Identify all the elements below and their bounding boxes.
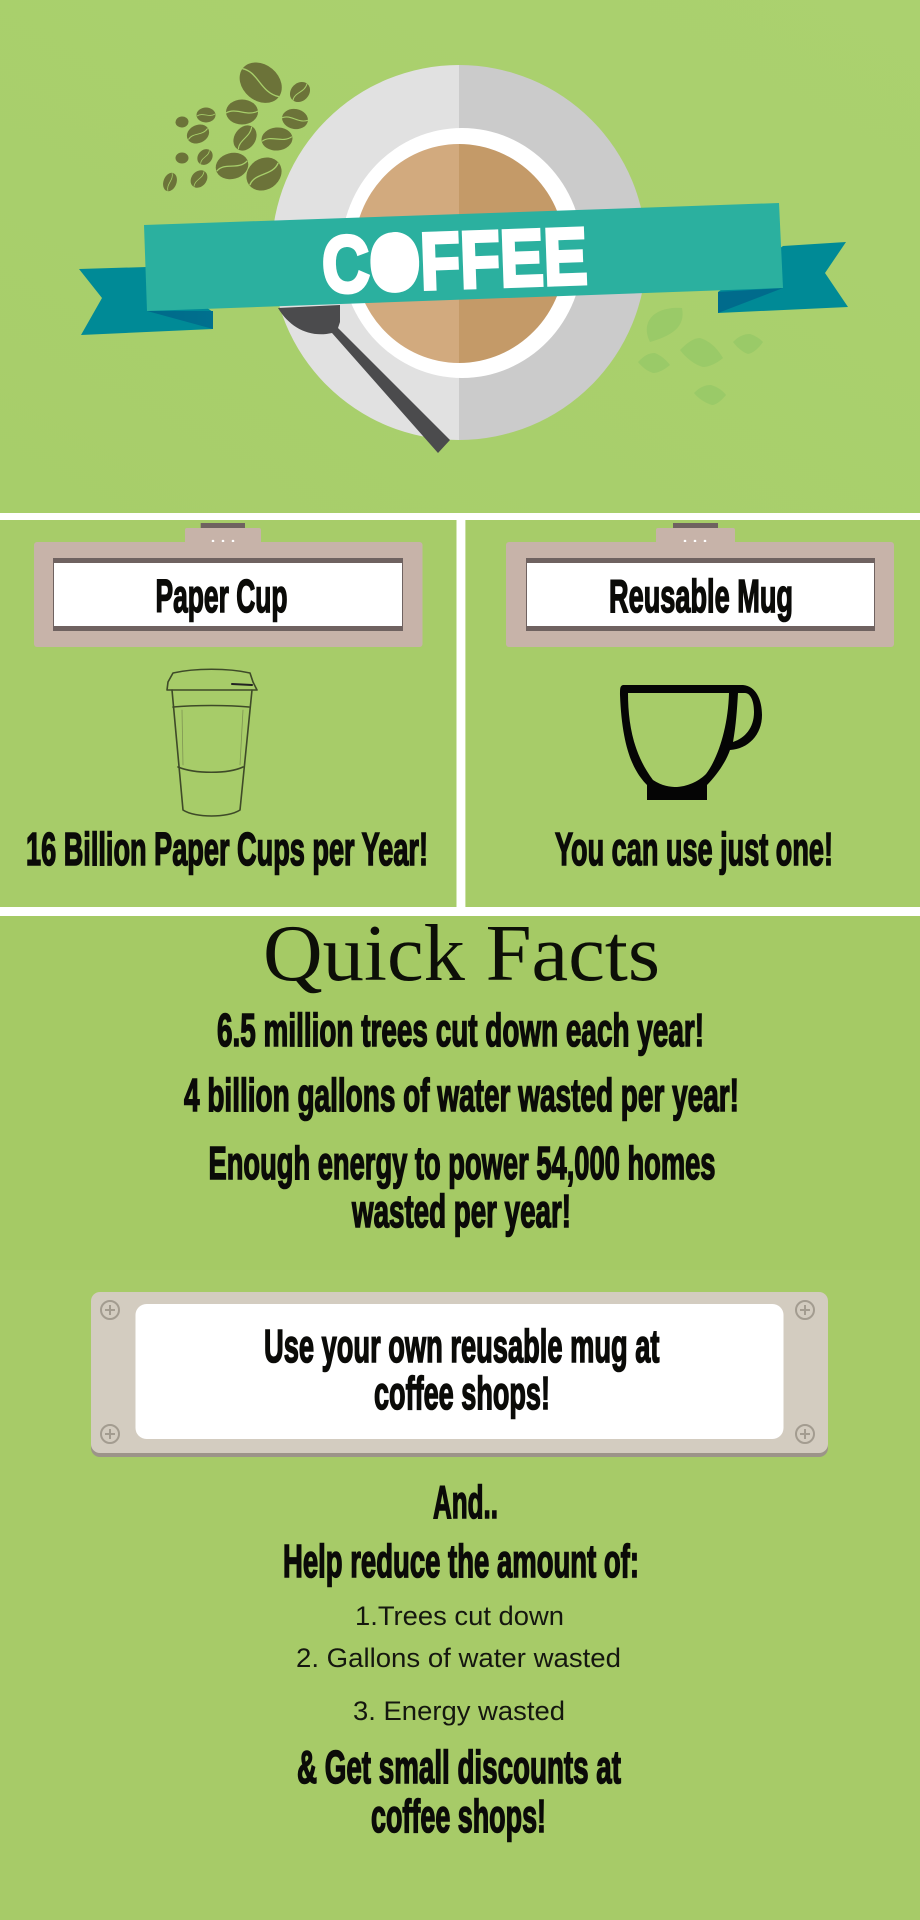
icon: spoon — [278, 305, 450, 453]
ribbon left fold — [147, 311, 213, 329]
ribbon left tail — [79, 267, 213, 335]
cup rim — [341, 128, 583, 378]
sign: reusable mug — [506, 523, 894, 647]
callout plate: use your own mug — [91, 1292, 828, 1457]
panel: header background — [0, 0, 920, 513]
caption: 16 billion cups: 16 Billion Paper Cups per Year! — [26, 823, 428, 875]
fact: energy: wasted per year! — [351, 1185, 571, 1237]
heading: Reusable Mug: Reusable Mug — [609, 570, 793, 622]
panel: paper cup — [0, 520, 456, 907]
title: COFFEE: COFFEE — [321, 211, 589, 310]
heading: Paper Cup: Paper Cup — [156, 570, 288, 622]
text: help reduce: Help reduce the amount of: — [283, 1535, 639, 1587]
icon: mug — [620, 685, 762, 800]
coffee surface — [354, 144, 565, 363]
icon: coffee cup on plate — [272, 65, 646, 440]
text: discounts: & Get small discounts at — [297, 1741, 621, 1793]
list: reductions: 1.Trees cut down — [355, 1601, 564, 1631]
ribbon main band — [144, 203, 783, 311]
plate — [272, 65, 646, 440]
list: reductions — [296, 1601, 621, 1726]
ribbon right tail — [718, 242, 848, 313]
list: reductions: 3. Energy wasted — [353, 1696, 565, 1726]
panel: bottom section — [0, 1270, 920, 1920]
panel: quick facts — [0, 910, 920, 1270]
text: And..: And.. — [433, 1476, 498, 1528]
screws — [101, 1301, 814, 1443]
text: discounts — [297, 1741, 621, 1842]
list: reductions: 2. Gallons of water wasted — [296, 1643, 621, 1673]
ribbon right fold — [718, 288, 783, 313]
text: discounts: coffee shops! — [371, 1790, 546, 1842]
ribbon banner — [79, 203, 848, 335]
decorative leaves — [638, 308, 763, 405]
icon: paper cup — [167, 669, 257, 816]
sign: paper cup — [34, 523, 422, 647]
fact: energy — [208, 1137, 716, 1237]
coffee beans — [161, 54, 314, 197]
panel: reusable mug — [465, 520, 920, 907]
callout text — [264, 1320, 660, 1419]
callout text: Use your own reusable mug at — [264, 1320, 660, 1372]
callout text: coffee shops! — [374, 1367, 550, 1419]
heading: Quick Facts: Quick Facts — [263, 910, 660, 998]
